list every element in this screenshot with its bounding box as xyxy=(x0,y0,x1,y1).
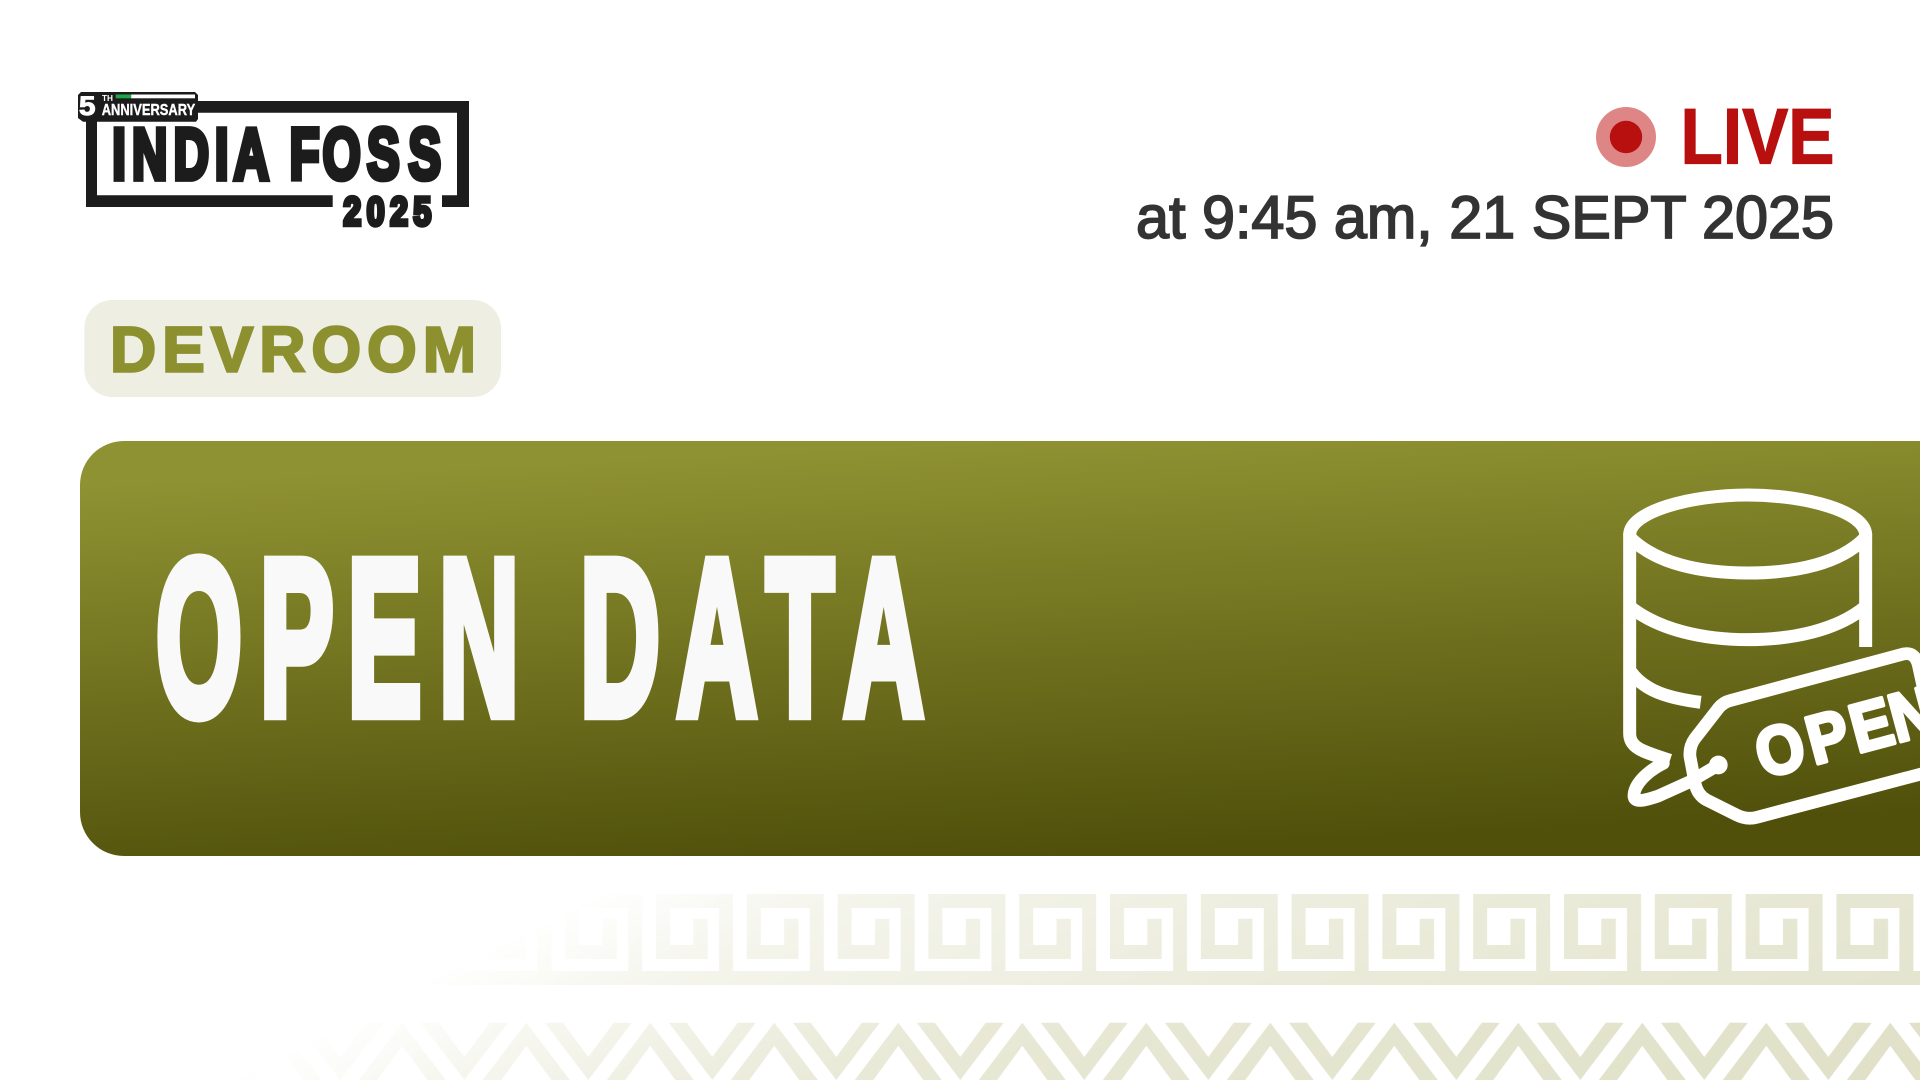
pill background xyxy=(84,300,501,397)
database right wall xyxy=(1846,533,1885,647)
database rim lower arc xyxy=(1631,538,1865,573)
logo: India FOSS 2025 5th anniversary xyxy=(78,91,469,234)
banner background xyxy=(80,441,1920,856)
numeral 5: 5 xyxy=(79,91,96,121)
live indicator xyxy=(1596,92,1834,180)
database left wall xyxy=(1630,533,1670,760)
middle disk arc xyxy=(1631,607,1865,640)
anniversary badge xyxy=(78,91,198,122)
logo frame xyxy=(86,101,469,207)
record dot xyxy=(1596,107,1656,167)
logo wordmark: INDIA FOSS xyxy=(112,115,441,196)
logo year: 2025 xyxy=(343,189,431,234)
pill label: DEVROOM xyxy=(110,314,476,386)
LIVE label: LIVE xyxy=(1680,92,1834,180)
banner title: OPEN DATA xyxy=(156,515,924,762)
decorative greek key band xyxy=(528,894,1920,985)
decorative chevron band xyxy=(360,1022,1920,1080)
tag string xyxy=(1634,763,1718,800)
panel: open data banner xyxy=(80,441,1920,856)
lower disk arc xyxy=(1631,672,1701,702)
TH superscript: TH xyxy=(102,94,113,103)
ANNIVERSARY label: ANNIVERSARY xyxy=(102,102,195,119)
tag outline xyxy=(1690,654,1920,818)
date and time: at 9:45 am, 21 SEPT 2025 xyxy=(1136,184,1834,251)
tag hole xyxy=(1709,756,1728,774)
devroom pill xyxy=(84,300,501,397)
progress bar xyxy=(116,94,195,98)
icon: database with open tag xyxy=(1630,495,1920,818)
database top rim xyxy=(1630,495,1866,535)
